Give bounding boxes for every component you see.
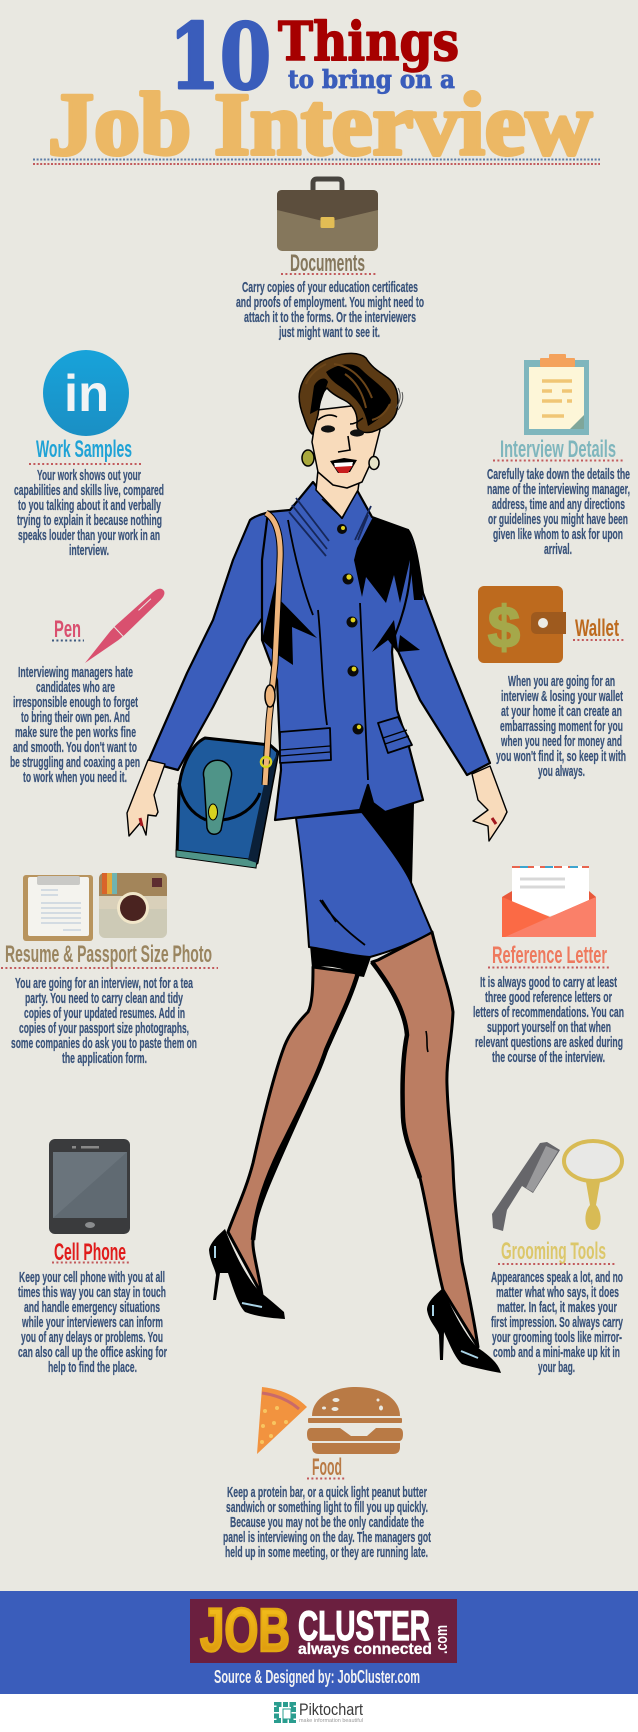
text: work samples: speaks louder than your work in an (18, 527, 160, 544)
text: cell phone: you of any delays or problems. You (21, 1329, 163, 1346)
back leg (228, 967, 358, 1295)
eyes and nose (318, 415, 364, 452)
footer white strip (0, 1694, 638, 1732)
text: wallet (496, 673, 626, 780)
text: pen: and smooth. You don't want to (13, 739, 137, 756)
shoulder bag (176, 513, 280, 868)
jacket shadows (354, 517, 423, 603)
back shoe (209, 1229, 285, 1319)
logo: JobCluster: JOB (200, 1596, 290, 1664)
heading: Food: Food (312, 1454, 342, 1481)
icon: burger (307, 1387, 403, 1454)
text: food: sandwich or something light to fill you up quickly. (226, 1499, 428, 1516)
wordmark: Piktochart (299, 1700, 363, 1719)
icon: mirror (564, 1141, 622, 1230)
title word Things: Things (278, 11, 459, 73)
text: documents: attach it to the forms. Or the interviewers (244, 309, 416, 326)
text: pen: make sure the pen works fine (15, 724, 136, 741)
text: cell phone: times this way you can stay in touch (18, 1284, 166, 1301)
panel: work samples (14, 350, 164, 559)
panel: interview details (487, 354, 630, 558)
text: cell phone: Keep your cell phone with you at all (19, 1269, 165, 1286)
heading: Resume and Passport: Resume & Passport Size Photo (5, 941, 212, 968)
text: documents (236, 279, 424, 341)
right pocket (378, 717, 412, 753)
neck (316, 470, 360, 518)
text: pen: be struggling and coaxing a pen (10, 754, 140, 771)
text: resume: copies of your updated resumes. Add in (24, 1005, 185, 1022)
text: interview details: arrival. (544, 541, 572, 558)
text: work samples: trying to explain it because nothing (17, 512, 162, 529)
icon: camera (99, 873, 167, 938)
text: resume: copies of your passport size photographs, (19, 1020, 189, 1037)
front leg (372, 932, 478, 1347)
source credit: Source & Designed by: JobCluster.com (214, 1667, 420, 1687)
text: cell phone: can also call up the office asking for (18, 1344, 167, 1361)
text: cell phone: and handle emergency situations (24, 1299, 160, 1316)
panel: wallet (478, 586, 626, 780)
text: pen: irresponsible enough to forget (13, 694, 138, 711)
text: cell phone: help to find the place. (48, 1359, 137, 1376)
text: resume (11, 975, 197, 1067)
panel: documents (236, 179, 424, 341)
logo: JobCluster: .com (432, 1625, 451, 1654)
text: work samples: to you talking about it and verbally (18, 497, 161, 514)
title subline: to bring on a (288, 65, 455, 94)
icon: wallet (478, 586, 566, 663)
heading: Cell Phone: Cell Phone (54, 1239, 126, 1266)
title number 10: 10 (169, 4, 271, 110)
panel: food (223, 1387, 431, 1561)
text: cell phone (18, 1269, 167, 1376)
icon: envelope (502, 866, 596, 937)
title Job Interview: Job Interview (48, 76, 592, 174)
icon: pizza (257, 1387, 307, 1454)
icon: linkedin: in (64, 365, 109, 423)
panel: cell phone (18, 1139, 167, 1376)
figure: woman in blue suit (127, 353, 507, 1373)
text: resume: party. You need to carry clean and tidy (25, 990, 183, 1007)
text: work samples: capabilities and skills live, compared (14, 482, 164, 499)
left pocket (280, 728, 331, 763)
right hand (472, 766, 507, 841)
text: resume: some companies do ask you to paste them on (11, 1035, 197, 1052)
text: pen (10, 664, 140, 786)
mouth (330, 458, 357, 473)
text: grooming tools: your bag. (538, 1359, 575, 1376)
text: food (223, 1484, 431, 1561)
text: resume: You are going for an interview, not for a tea (15, 975, 193, 992)
icon: piktochart (276, 1704, 294, 1720)
earrings (302, 450, 379, 470)
text: pen: candidates who are (36, 679, 115, 696)
buttons (337, 524, 364, 734)
logo: JobCluster: CLUSTER (298, 1602, 430, 1649)
icon: pen (81, 585, 168, 668)
under skirt shadow (310, 945, 371, 977)
front shoe (427, 1288, 501, 1373)
tagline: make information beautiful (299, 1718, 363, 1724)
text: food: panel is interviewing on the day. The managers got (223, 1529, 431, 1546)
text: food: Because you may not be the only candidate the (230, 1514, 424, 1531)
face (312, 405, 380, 488)
text: documents: and proofs of employment. You might need to (236, 294, 424, 311)
text: documents: just might want to see it. (278, 324, 380, 341)
icon: comb (492, 1142, 560, 1231)
icon: clipboard (524, 354, 589, 435)
icon: wallet: $ (488, 595, 520, 660)
panel: reference letter (473, 866, 624, 1066)
icon: tablet (49, 1139, 130, 1234)
text: food: held up in some meeting, or they are running late. (225, 1544, 428, 1561)
left arm (148, 512, 283, 770)
text: resume: the application form. (62, 1050, 147, 1067)
icon: resume clipboard (23, 875, 93, 941)
text: grooming tools (491, 1269, 623, 1376)
piktochart logo (276, 1700, 363, 1724)
skirt (296, 812, 432, 957)
text: reference letter (473, 974, 624, 1066)
logo: JobCluster (190, 1596, 457, 1664)
text: work samples: Your work shows out your (37, 467, 141, 484)
heading: Work Samples: Work Samples (36, 436, 132, 463)
logo: JobCluster: always connected (298, 1641, 432, 1658)
icon: briefcase (277, 179, 378, 251)
title (48, 4, 592, 174)
panel: resume and passport photo (1, 873, 218, 1067)
text: pen: Interviewing managers hate (18, 664, 133, 681)
heading: Pen: Pen (54, 616, 81, 643)
panel: grooming tools (491, 1141, 623, 1376)
text: cell phone: while your interviewers can inform (21, 1314, 163, 1331)
bag strap (265, 513, 280, 785)
footer band (0, 1591, 638, 1694)
text: work samples: interview. (69, 542, 109, 559)
hair (299, 353, 398, 434)
text: documents: Carry copies of your education certificates (242, 279, 418, 296)
panel: pen (10, 585, 168, 786)
left hand (127, 760, 165, 836)
text: pen: to work when you need it. (23, 769, 127, 786)
text: interview details (487, 466, 630, 558)
text: work samples (14, 467, 164, 559)
jacket torso (262, 482, 423, 820)
text: wallet: you always. (538, 763, 585, 780)
text: pen: to bring their own pen. And (21, 709, 130, 726)
heading: Documents: Documents (290, 250, 365, 277)
right arm (385, 530, 490, 775)
text: food: Keep a protein bar, or a quick light peanut butter (227, 1484, 427, 1501)
icon: linkedin (43, 350, 129, 436)
